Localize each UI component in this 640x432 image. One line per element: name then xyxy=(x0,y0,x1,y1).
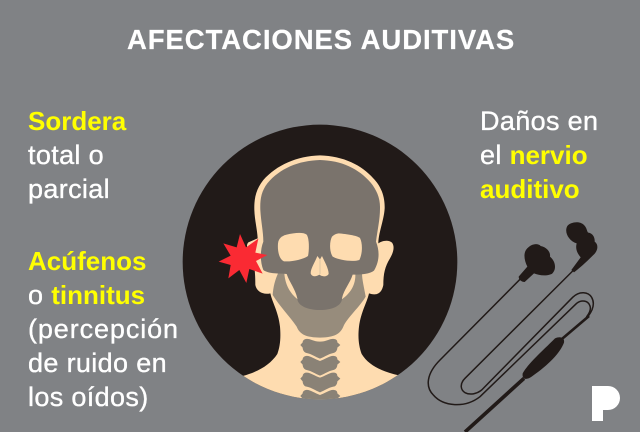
jaw xyxy=(273,273,366,338)
logo xyxy=(592,386,620,421)
left earbud xyxy=(519,244,555,282)
text: nervio auditivo: Daños en xyxy=(480,106,598,136)
black circle xyxy=(183,125,457,399)
eye sockets and nose xyxy=(278,233,362,276)
text: sordera: Sordera xyxy=(28,106,126,136)
main cord xyxy=(465,378,524,432)
icon: red pain burst xyxy=(219,234,267,283)
vertebrae xyxy=(300,339,340,404)
text: acufenos xyxy=(28,246,179,412)
title: AFECTACIONES AUDITIVAS xyxy=(127,24,515,55)
head illustration xyxy=(183,125,457,407)
text: sordera: total o xyxy=(28,140,104,170)
text: acufenos: de ruido en xyxy=(28,348,167,378)
head and neck silhouette xyxy=(243,155,400,407)
text: acufenos: los oídos) xyxy=(28,382,149,412)
text: sordera: parcial xyxy=(28,174,110,204)
earphones xyxy=(428,222,597,432)
text: acufenos: (percepción xyxy=(28,314,179,344)
text: sordera xyxy=(28,106,126,204)
right earbud xyxy=(566,222,597,272)
cable xyxy=(428,271,593,432)
text: acufenos: Acúfenos xyxy=(28,246,146,276)
cheek gaps xyxy=(284,273,299,300)
text: acufenos: o tinnitus xyxy=(28,280,145,310)
text: nervio auditivo xyxy=(480,106,598,204)
text: nervio auditivo: auditivo xyxy=(480,174,580,204)
illustration: skull, earphones and logo xyxy=(182,124,620,432)
text: nervio auditivo: el nervio xyxy=(480,140,588,170)
skull xyxy=(260,160,380,310)
remote control xyxy=(523,337,564,379)
